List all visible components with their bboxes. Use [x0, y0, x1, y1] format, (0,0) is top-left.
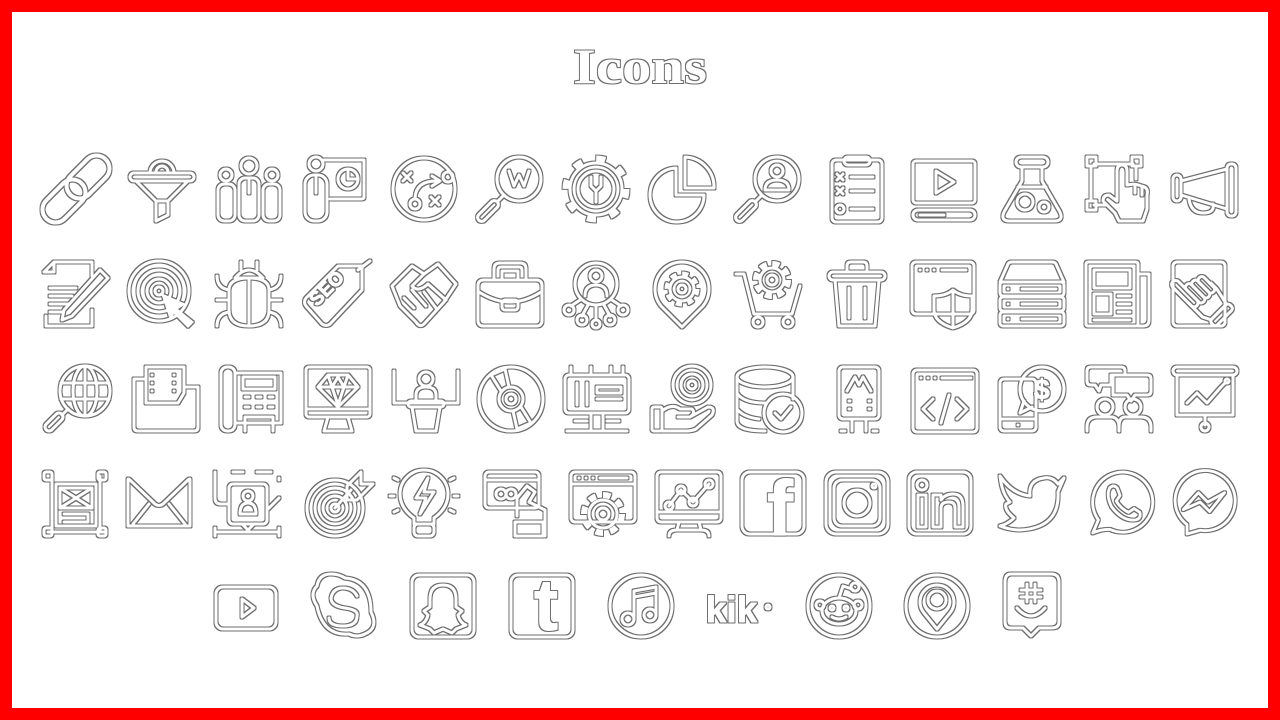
icon: tumblr: t [534, 566, 558, 646]
icon: video player [913, 161, 975, 220]
icon: speaker at podium [394, 371, 458, 431]
icon: secure window [912, 262, 974, 328]
icon: credit card in hand [485, 472, 545, 536]
icon: newspaper [1086, 262, 1149, 326]
icon: chain link [37, 150, 115, 228]
icon: youtube [216, 587, 276, 629]
icon: target cursor [129, 261, 194, 328]
icon: camera selfie bubble [215, 472, 279, 536]
icon: folder with document [134, 367, 198, 431]
icon: presentation line chart [1173, 367, 1237, 431]
icon: SEO tag: SEO [306, 267, 349, 311]
icon: facebook: f [767, 464, 794, 552]
icon: note and pencil [44, 262, 108, 326]
icon: groupme [1005, 574, 1059, 636]
icon: tablet with pointing hand [1170, 262, 1235, 328]
icon: trash bin [829, 262, 885, 326]
icon: code window [913, 370, 977, 432]
icon: server stack [1000, 262, 1064, 326]
icon: gear with wrench [566, 159, 626, 219]
icon: handshake [392, 264, 456, 326]
icon: compact disc [479, 367, 543, 431]
icon: search W [476, 157, 541, 223]
icon: briefcase [478, 263, 542, 326]
icon: map sign [839, 367, 879, 431]
icon: whatsapp [1093, 472, 1153, 533]
icon: kik: kik [706, 589, 758, 630]
icon: mail envelope [128, 479, 190, 526]
icon: snapchat [412, 575, 474, 637]
icon: funnel [130, 161, 194, 221]
icon: music note [610, 575, 672, 637]
icon: megaphone [1173, 164, 1236, 216]
icon: hand holding coin [652, 366, 713, 431]
icon: phone payment: $ [1034, 374, 1050, 405]
icon: lab flask [1003, 157, 1061, 221]
icon: database check [737, 367, 802, 432]
icon: person network [564, 263, 628, 328]
icon: facebook [742, 464, 804, 552]
icon: checklist [832, 157, 882, 222]
icon: billboard [565, 367, 629, 431]
icon: pie chart [650, 157, 714, 222]
icon: global search [43, 366, 110, 433]
icon: fax phone [221, 367, 281, 431]
icon: people chatting [1087, 367, 1151, 431]
icon: location gear pin [655, 262, 709, 327]
icon: presenter with chart [305, 157, 364, 221]
icon: twitter bird [1000, 476, 1064, 530]
icon: bullseye arrow [307, 472, 373, 536]
icon: layout frame with X [44, 472, 106, 536]
icon: instagram [826, 472, 888, 534]
icon: team of three [218, 158, 280, 221]
title: Icons [573, 38, 707, 94]
icon: monitor line graph [657, 472, 721, 536]
icon: SEO tag [304, 261, 370, 326]
icon: cart with gear [736, 264, 800, 327]
icon: monitor diamond [306, 367, 370, 431]
icon: browser settings [571, 472, 635, 533]
icon: reddit [808, 575, 870, 637]
icon: light bulb bolt [390, 470, 458, 536]
icon: phone payment [1000, 367, 1064, 431]
icon: hand on selection frame [1087, 157, 1147, 221]
icon: bug [217, 262, 281, 326]
icon: strategy playbook [393, 158, 455, 220]
icon: search person [734, 157, 799, 223]
icon: skype [313, 574, 374, 636]
icon: messenger [1175, 471, 1235, 534]
icon: linkedin [909, 472, 971, 534]
icon: periscope pin [906, 575, 968, 637]
icon: tumblr [511, 566, 573, 646]
